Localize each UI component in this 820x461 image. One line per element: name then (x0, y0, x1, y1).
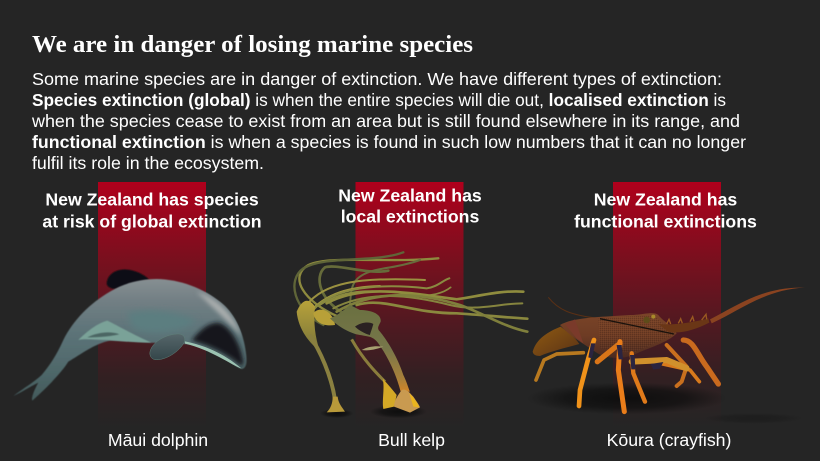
intro text block: Species extinction (global) is when the entire species will die out, localised extinction is (32, 90, 726, 110)
label: Bull kelp: Bull kelp (378, 430, 445, 450)
crayfish antennae (710, 288, 805, 323)
panel: red bar global (98, 182, 206, 427)
intro text block: Some marine species are in danger of extinction. We have different types of extinction: (32, 69, 722, 89)
shadow: kelp holdfasts (320, 405, 427, 418)
heading: global extinction: at risk of global extinction (42, 212, 262, 232)
heading: global extinction: New Zealand has species (45, 190, 259, 210)
crayfish head (658, 318, 709, 332)
kelp body (330, 305, 410, 392)
intro text block: functional extinction is when a species is found in such low numbers that it can no longer (32, 132, 746, 152)
label: Koura crayfish: Kōura (crayfish) (607, 430, 731, 450)
crayfish leg markings (588, 343, 663, 370)
panel: red bar local (356, 182, 464, 427)
crayfish tail (533, 327, 579, 356)
kelp blades (297, 301, 320, 352)
shadow: crayfish (527, 382, 803, 424)
heading: functional extinction: New Zealand has (594, 190, 737, 210)
crayfish legs (536, 340, 718, 412)
intro text block: fulfil its role in the ecosystem. (32, 153, 264, 173)
panel: red bar functional (613, 182, 721, 427)
heading: functional extinction (574, 190, 757, 232)
heading: global extinction (42, 190, 262, 232)
heading: local extinction (338, 186, 482, 226)
heading: functional extinction: functional extinctions (574, 212, 757, 232)
kelp strands (294, 252, 527, 332)
intro text block: when the species cease to exist from an area but is still found elsewhere in its range, and (31, 111, 740, 131)
crayfish body (560, 313, 677, 358)
label: Maui dolphin: Māui dolphin (108, 430, 208, 450)
intro text block (31, 69, 746, 173)
icon: Maui dolphin (13, 269, 246, 401)
heading: local extinction: local extinctions (341, 206, 479, 226)
kelp holdfasts (327, 397, 345, 412)
icon: bull kelp (294, 252, 527, 418)
title: We are in danger of losing marine species (32, 32, 473, 58)
kelp stems (309, 335, 335, 400)
heading: local extinction: New Zealand has (338, 186, 482, 206)
icon: koura crayfish (527, 288, 805, 424)
